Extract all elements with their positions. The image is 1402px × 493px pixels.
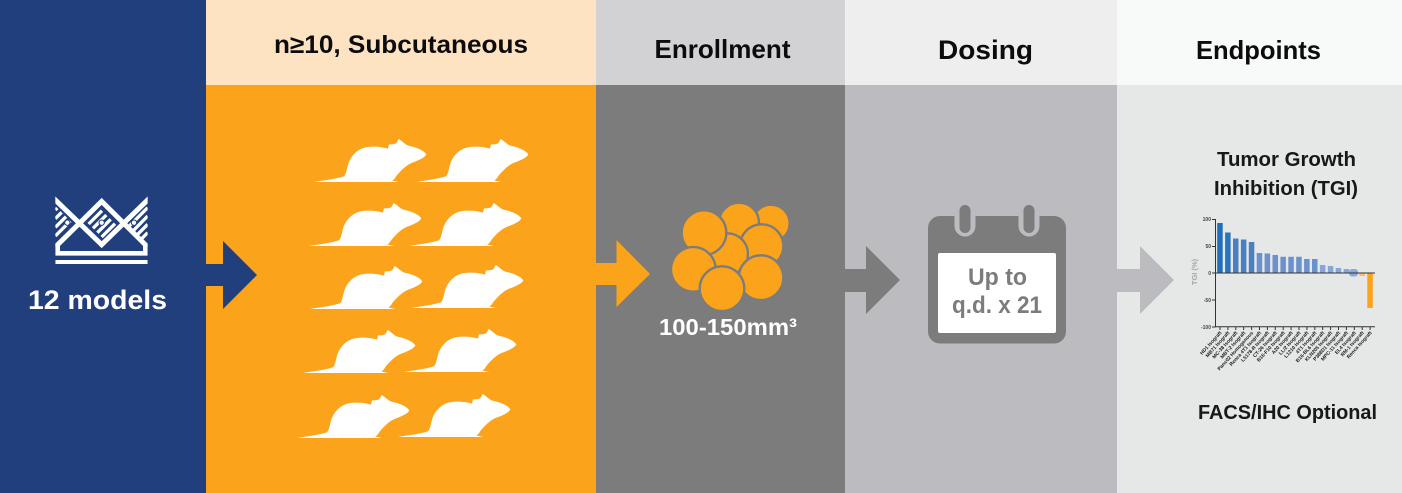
text: FACS/IHC Optional: FACS/IHC Optional xyxy=(1198,402,1377,424)
x-axis labels: B16-F10 Isograft xyxy=(1256,330,1287,363)
label: tumor volume: 100-150mm³ xyxy=(659,314,797,340)
y-axis labels: 50 xyxy=(1205,244,1211,250)
panel: dosing xyxy=(845,0,1117,493)
y-axis labels: -100 xyxy=(1201,325,1211,331)
panel: subcutaneous xyxy=(206,0,596,493)
bars xyxy=(1217,223,1373,308)
x-axis labels: MC-38 Isograft xyxy=(1212,330,1240,360)
x-axis labels: MB71 Isograft xyxy=(1205,330,1232,359)
x-axis labels: MPC-11 Isograft xyxy=(1320,330,1350,362)
icon group: mice xyxy=(297,139,528,438)
heading: Dosing: Dosing xyxy=(938,35,1033,65)
text: Tumor Growth Inhibition: Inhibition (TGI) xyxy=(1214,178,1358,200)
heading: n≥10, Subcutaneous: n≥10, Subcutaneous xyxy=(274,31,528,59)
panel: enrollment xyxy=(596,0,845,493)
x-axis labels: P388D1 Isograft xyxy=(1312,330,1342,362)
x-axis labels: Renca 4T1 Isograft xyxy=(1229,330,1263,368)
text: dosing schedule: Up to xyxy=(968,264,1027,291)
arrow: models to subcutaneous xyxy=(206,241,257,309)
axes xyxy=(1212,219,1375,327)
text: Tumor Growth Inhibition: Tumor Growth xyxy=(1217,149,1356,171)
label: 12 models: 12 models xyxy=(28,285,167,315)
x-axis labels: MBT-2 Isograft xyxy=(1219,330,1247,360)
x-axis labels: EL4 Isograft xyxy=(1334,330,1358,356)
y-axis labels: -50 xyxy=(1204,298,1211,304)
icon: crown xyxy=(53,197,150,264)
x-axis labels: CT-26 Isograft xyxy=(1252,330,1279,359)
x-axis labels: L5178-R Isograft xyxy=(1240,330,1271,363)
x-axis labels: B16-BL6 Isograft xyxy=(1295,330,1326,364)
heading: Endpoints: Endpoints xyxy=(1196,35,1321,65)
x-axis labels: Panc02 Homogenous xyxy=(1217,330,1255,372)
icon: calendar xyxy=(928,205,1066,344)
x-axis ticks xyxy=(1220,327,1370,330)
y-axis labels xyxy=(1201,217,1211,331)
x-axis labels xyxy=(1199,330,1374,372)
y-axis labels: 100 xyxy=(1203,217,1211,223)
y-axis title: TGI (%) xyxy=(1190,258,1199,285)
chart: TGI waterfall xyxy=(1190,217,1375,372)
x-axis labels: 4T1 Isograft xyxy=(1295,330,1319,355)
heading: Enrollment: Enrollment xyxy=(654,34,791,64)
x-axis labels: Renca Isograft xyxy=(1346,330,1374,360)
text: Tumor Growth Inhibition xyxy=(1214,149,1358,200)
y-axis labels: 0 xyxy=(1208,271,1211,277)
x-axis labels: HD1 Isograft xyxy=(1199,330,1224,356)
icon: tumor cell cluster xyxy=(671,203,790,311)
x-axis labels: LL/2 Isograft xyxy=(1278,330,1303,357)
panel: models xyxy=(0,0,206,493)
text: dosing schedule: q.d. x 21 xyxy=(952,292,1042,319)
panel: endpoints xyxy=(1117,0,1402,493)
x-axis labels: KLN205 Isograft xyxy=(1304,330,1334,363)
x-axis labels: RM-1 Isograft xyxy=(1340,330,1366,358)
x-axis labels: L1210 Isograft xyxy=(1283,330,1311,360)
arrow: enrollment to dosing xyxy=(845,246,900,314)
x-axis labels: A20 Isograft xyxy=(1271,330,1295,356)
arrow: dosing to endpoints xyxy=(1117,246,1174,314)
arrow: subcutaneous to enrollment xyxy=(596,240,650,307)
text: dosing schedule xyxy=(952,264,1042,319)
